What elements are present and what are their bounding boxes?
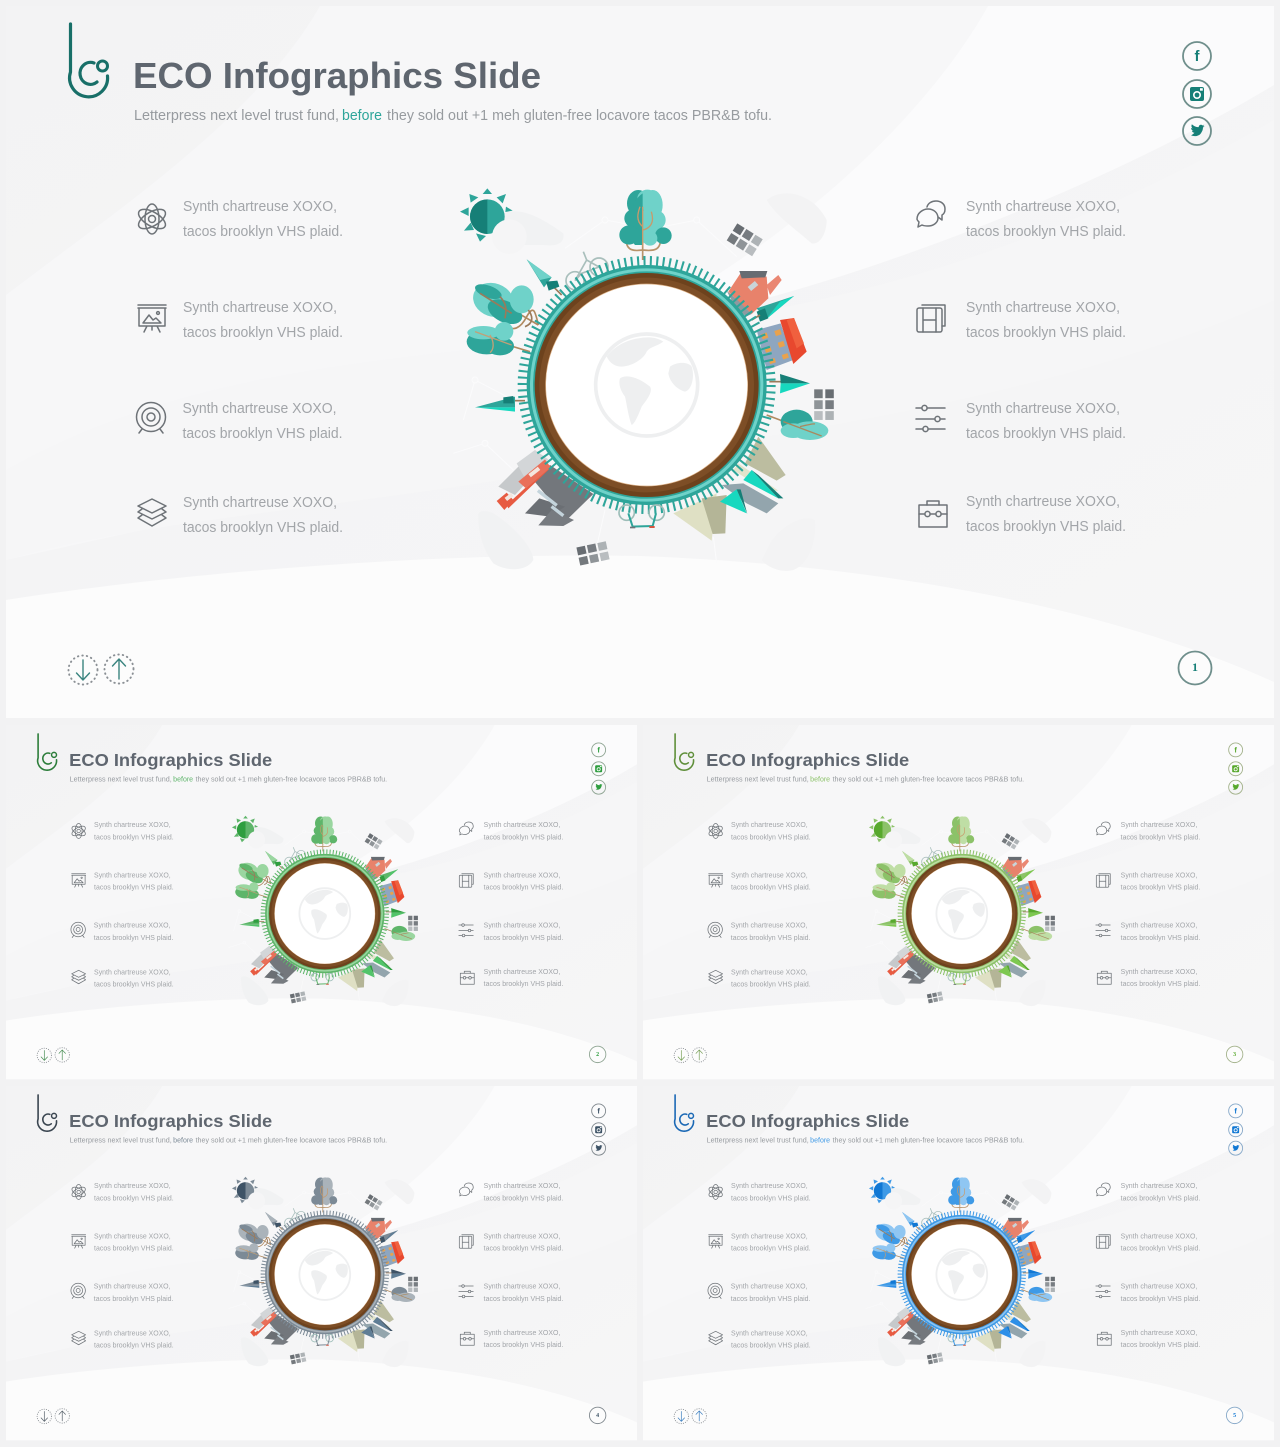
feature list right 2: tacos brooklyn VHS plaid. <box>484 1244 563 1253</box>
subtitle: before <box>173 775 193 784</box>
icon: logo <box>675 1095 694 1131</box>
feature list right 3: Synth chartreuse XOXO, <box>1121 921 1197 930</box>
feature list right 2 <box>459 870 563 892</box>
icon: logo <box>38 734 57 770</box>
feature list left 3: Synth chartreuse XOXO, <box>94 1282 170 1291</box>
subtitle: before <box>810 1136 830 1145</box>
feature list right 3: tacos brooklyn VHS plaid. <box>484 1294 563 1303</box>
title: ECO Infographics Slide <box>69 1111 272 1131</box>
feature list right 1: Synth chartreuse XOXO, <box>1121 820 1197 829</box>
title: ECO Infographics Slide <box>706 750 909 770</box>
feature list left 4 <box>72 967 174 989</box>
feature list right 2: tacos brooklyn VHS plaid. <box>1121 1244 1200 1253</box>
feature list left 4: tacos brooklyn VHS plaid. <box>731 980 811 989</box>
feature list left 1 <box>707 820 811 841</box>
feature list right 4: Synth chartreuse XOXO, <box>484 1328 560 1337</box>
feature list right 3 <box>459 921 563 942</box>
feature list right 1: tacos brooklyn VHS plaid. <box>484 832 563 841</box>
feature list left 4: Synth chartreuse XOXO, <box>731 1328 808 1337</box>
feature list left 1: tacos brooklyn VHS plaid. <box>94 1193 174 1202</box>
feature list left 1 <box>70 1181 174 1202</box>
feature list right 1 <box>459 820 563 841</box>
feature list right 2 <box>1096 870 1200 892</box>
navigation arrows <box>37 1048 69 1063</box>
subtitle <box>707 1136 1024 1145</box>
page number: 5 <box>1233 1413 1236 1419</box>
feature list left 1 <box>136 198 343 240</box>
feature list left 1: tacos brooklyn VHS plaid. <box>731 1193 811 1202</box>
social icons: f <box>1194 48 1200 65</box>
feature list left 2: Synth chartreuse XOXO, <box>94 1231 171 1240</box>
page number <box>1226 1046 1243 1063</box>
feature list left 1: tacos brooklyn VHS plaid. <box>183 223 343 240</box>
page number: 3 <box>1233 1052 1236 1058</box>
feature list right 4: Synth chartreuse XOXO, <box>1121 967 1197 976</box>
planet illustration <box>229 1177 418 1367</box>
feature list left 4: Synth chartreuse XOXO, <box>731 967 808 976</box>
feature list right 3: tacos brooklyn VHS plaid. <box>1121 933 1200 942</box>
feature list right 1: Synth chartreuse XOXO, <box>484 820 560 829</box>
navigation arrows <box>674 1409 706 1424</box>
feature list left 3: Synth chartreuse XOXO, <box>731 1282 807 1291</box>
feature list right 2: Synth chartreuse XOXO, <box>966 299 1120 316</box>
feature list right 1: Synth chartreuse XOXO, <box>1121 1181 1197 1190</box>
feature list right 4 <box>1097 1328 1200 1349</box>
feature list left 2 <box>72 870 174 892</box>
slide background <box>643 1086 1274 1440</box>
social icons: f <box>1234 745 1237 754</box>
feature list right 4 <box>460 1328 563 1349</box>
feature list left 4 <box>72 1328 174 1350</box>
feature list right 4: tacos brooklyn VHS plaid. <box>484 979 563 988</box>
subtitle: Letterpress next level trust fund, <box>707 1136 809 1145</box>
feature list right 3 <box>916 400 1126 442</box>
subtitle: they sold out +1 meh gluten-free locavore tacos PBR&B tofu. <box>833 1136 1024 1145</box>
feature list right 4: tacos brooklyn VHS plaid. <box>484 1340 563 1349</box>
panel: main teal slide <box>6 6 1274 718</box>
feature list right 2: Synth chartreuse XOXO, <box>1121 1231 1197 1240</box>
title: ECO Infographics Slide <box>133 55 541 96</box>
feature list right 3: Synth chartreuse XOXO, <box>484 1282 560 1291</box>
subtitle <box>134 108 772 124</box>
feature list right 2: Synth chartreuse XOXO, <box>484 870 560 879</box>
subtitle: they sold out +1 meh gluten-free locavore tacos PBR&B tofu. <box>196 1136 387 1145</box>
page number: 4 <box>596 1413 599 1419</box>
subtitle: they sold out +1 meh gluten-free locavore tacos PBR&B tofu. <box>387 108 772 124</box>
feature list right 4: tacos brooklyn VHS plaid. <box>1121 979 1200 988</box>
page number: 2 <box>596 1052 599 1058</box>
feature list left 3: tacos brooklyn VHS plaid. <box>731 1294 810 1303</box>
feature list left 4: tacos brooklyn VHS plaid. <box>731 1341 811 1350</box>
feature list left 1: Synth chartreuse XOXO, <box>183 198 337 215</box>
feature list left 1: Synth chartreuse XOXO, <box>731 820 808 829</box>
feature list left 4 <box>138 494 343 536</box>
feature list left 1 <box>707 1181 811 1202</box>
feature list left 1: Synth chartreuse XOXO, <box>94 820 171 829</box>
slide background <box>6 1086 637 1440</box>
feature list right 1: Synth chartreuse XOXO, <box>966 198 1120 215</box>
feature list left 3: Synth chartreuse XOXO, <box>731 921 807 930</box>
feature list right 2 <box>917 299 1126 341</box>
feature list right 3 <box>1096 921 1200 942</box>
slide background <box>6 6 1274 718</box>
feature list right 1 <box>1096 820 1200 841</box>
page number: 1 <box>1192 660 1198 674</box>
planet illustration <box>453 188 834 571</box>
feature list left 2 <box>709 870 811 892</box>
subtitle <box>70 1136 387 1145</box>
feature list left 2 <box>138 299 343 341</box>
feature list right 2: Synth chartreuse XOXO, <box>1121 870 1197 879</box>
subtitle <box>70 775 387 784</box>
feature list right 1 <box>459 1181 563 1202</box>
subtitle: Letterpress next level trust fund, <box>70 1136 172 1145</box>
feature list left 2: tacos brooklyn VHS plaid. <box>731 1244 811 1253</box>
feature list right 1 <box>917 198 1126 240</box>
feature list right 2: Synth chartreuse XOXO, <box>484 1231 560 1240</box>
feature list right 1 <box>1096 1181 1200 1202</box>
feature list left 4: Synth chartreuse XOXO, <box>94 1328 171 1337</box>
feature list left 3: tacos brooklyn VHS plaid. <box>731 933 810 942</box>
feature list right 4: tacos brooklyn VHS plaid. <box>966 518 1126 535</box>
feature list right 3 <box>459 1282 563 1303</box>
social icons <box>592 1104 606 1155</box>
subtitle: they sold out +1 meh gluten-free locavore tacos PBR&B tofu. <box>833 775 1024 784</box>
title: ECO Infographics Slide <box>706 1111 909 1131</box>
page number <box>1178 652 1212 684</box>
feature list right 3: Synth chartreuse XOXO, <box>484 921 560 930</box>
feature list right 1: tacos brooklyn VHS plaid. <box>1121 832 1200 841</box>
feature list left 3 <box>71 921 173 942</box>
icon: logo <box>38 1095 57 1131</box>
feature list left 4: tacos brooklyn VHS plaid. <box>183 519 343 536</box>
feature list left 3: Synth chartreuse XOXO, <box>94 921 170 930</box>
feature list left 2: Synth chartreuse XOXO, <box>731 870 808 879</box>
feature list left 3: tacos brooklyn VHS plaid. <box>94 1294 173 1303</box>
feature list left 2: Synth chartreuse XOXO, <box>183 299 337 316</box>
feature list left 3 <box>708 921 810 942</box>
title: ECO Infographics Slide <box>69 750 272 770</box>
feature list left 4: Synth chartreuse XOXO, <box>183 494 337 511</box>
page number <box>1226 1407 1243 1424</box>
feature list left 3: tacos brooklyn VHS plaid. <box>182 425 342 442</box>
feature list left 2: Synth chartreuse XOXO, <box>731 1231 808 1240</box>
social icons <box>1229 743 1243 794</box>
feature list left 4: tacos brooklyn VHS plaid. <box>94 980 174 989</box>
feature list right 3 <box>1096 1282 1200 1303</box>
feature list right 4 <box>1097 967 1200 988</box>
planet illustration <box>866 1177 1055 1367</box>
feature list left 2: tacos brooklyn VHS plaid. <box>731 883 811 892</box>
feature list right 4: tacos brooklyn VHS plaid. <box>1121 1340 1200 1349</box>
feature list right 2: tacos brooklyn VHS plaid. <box>966 324 1126 341</box>
feature list right 1: tacos brooklyn VHS plaid. <box>1121 1193 1200 1202</box>
feature list left 2 <box>72 1231 174 1253</box>
subtitle: before <box>342 108 382 124</box>
feature list right 3: tacos brooklyn VHS plaid. <box>966 425 1126 442</box>
icon: logo <box>675 734 694 770</box>
feature list right 2: tacos brooklyn VHS plaid. <box>484 883 563 892</box>
feature list left 3: tacos brooklyn VHS plaid. <box>94 933 173 942</box>
slide background <box>643 725 1274 1079</box>
social icons <box>1229 1104 1243 1155</box>
feature list right 3: Synth chartreuse XOXO, <box>1121 1282 1197 1291</box>
feature list left 4 <box>709 1328 811 1350</box>
panel: lime slide <box>643 725 1274 1079</box>
subtitle: Letterpress next level trust fund, <box>707 775 809 784</box>
feature list right 4 <box>460 967 563 988</box>
feature list left 1: Synth chartreuse XOXO, <box>94 1181 171 1190</box>
feature list right 4: Synth chartreuse XOXO, <box>484 967 560 976</box>
social icons <box>1183 42 1211 145</box>
subtitle: Letterpress next level trust fund, <box>70 775 172 784</box>
feature list left 2: tacos brooklyn VHS plaid. <box>94 883 174 892</box>
subtitle: before <box>810 775 830 784</box>
subtitle: before <box>173 1136 193 1145</box>
feature list left 1: tacos brooklyn VHS plaid. <box>94 832 174 841</box>
feature list right 1: Synth chartreuse XOXO, <box>484 1181 560 1190</box>
social icons: f <box>1234 1106 1237 1115</box>
feature list left 2 <box>709 1231 811 1253</box>
navigation arrows <box>674 1048 706 1063</box>
feature list left 2: tacos brooklyn VHS plaid. <box>183 324 343 341</box>
feature list left 1: Synth chartreuse XOXO, <box>731 1181 808 1190</box>
feature list left 2: tacos brooklyn VHS plaid. <box>94 1244 174 1253</box>
social icons <box>592 743 606 794</box>
navigation arrows <box>68 654 134 684</box>
feature list right 2: tacos brooklyn VHS plaid. <box>1121 883 1200 892</box>
social icons: f <box>597 1106 600 1115</box>
feature list right 1: tacos brooklyn VHS plaid. <box>484 1193 563 1202</box>
panel: blue slide <box>643 1086 1274 1440</box>
page number <box>589 1407 606 1424</box>
feature list left 4: tacos brooklyn VHS plaid. <box>94 1341 174 1350</box>
feature list right 3: tacos brooklyn VHS plaid. <box>1121 1294 1200 1303</box>
feature list right 1: tacos brooklyn VHS plaid. <box>966 223 1126 240</box>
feature list left 3 <box>71 1282 173 1303</box>
feature list left 1: tacos brooklyn VHS plaid. <box>731 832 811 841</box>
feature list right 4: Synth chartreuse XOXO, <box>966 493 1120 510</box>
feature list left 4: Synth chartreuse XOXO, <box>94 967 171 976</box>
feature list left 2: Synth chartreuse XOXO, <box>94 870 171 879</box>
social icons: f <box>597 745 600 754</box>
subtitle <box>707 775 1024 784</box>
feature list right 4 <box>919 493 1126 535</box>
planet illustration <box>229 816 418 1006</box>
panel: green slide <box>6 725 637 1079</box>
navigation arrows <box>37 1409 69 1424</box>
subtitle: Letterpress next level trust fund, <box>134 108 339 124</box>
feature list right 3: tacos brooklyn VHS plaid. <box>484 933 563 942</box>
feature list right 3: Synth chartreuse XOXO, <box>966 400 1120 417</box>
planet illustration <box>866 816 1055 1006</box>
feature list right 4: Synth chartreuse XOXO, <box>1121 1328 1197 1337</box>
slide background <box>6 725 637 1079</box>
panel: grey slide <box>6 1086 637 1440</box>
feature list left 4 <box>709 967 811 989</box>
subtitle: they sold out +1 meh gluten-free locavore tacos PBR&B tofu. <box>196 775 387 784</box>
feature list left 1 <box>70 820 174 841</box>
feature list left 3 <box>708 1282 810 1303</box>
page number <box>589 1046 606 1063</box>
icon: logo <box>70 24 108 97</box>
feature list right 2 <box>1096 1231 1200 1253</box>
feature list right 2 <box>459 1231 563 1253</box>
feature list left 3: Synth chartreuse XOXO, <box>182 400 336 417</box>
feature list left 3 <box>136 400 342 442</box>
